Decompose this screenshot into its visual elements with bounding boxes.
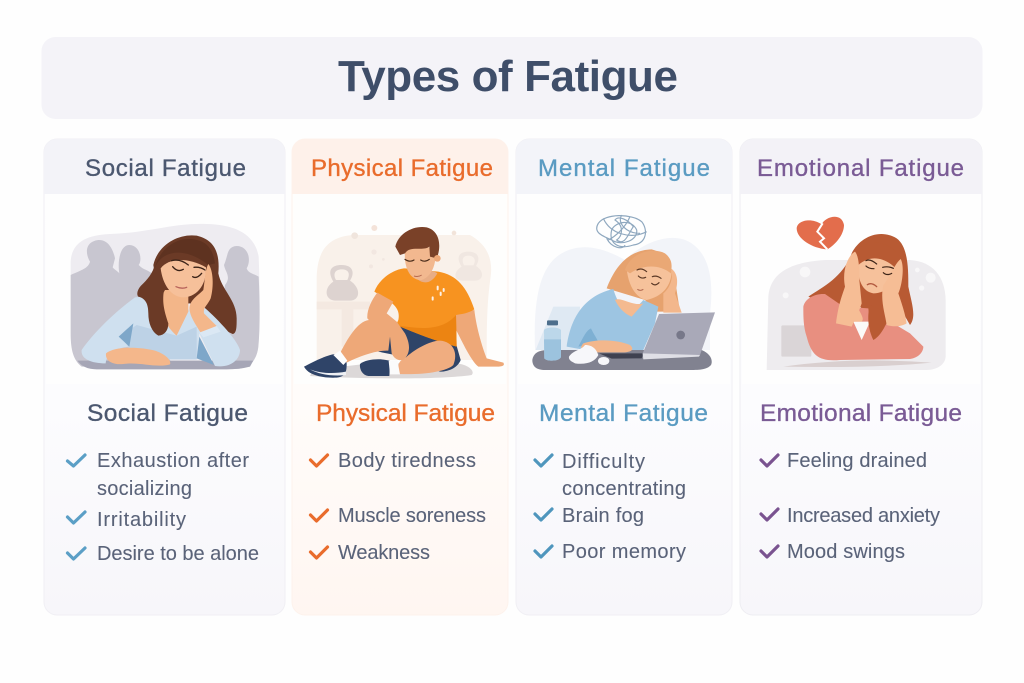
subheading: mental fatigue: Mental Fatigue (539, 400, 708, 427)
panel: physical fatigue (292, 139, 508, 615)
symptom list: emotional (761, 450, 940, 563)
symptom list: emotional: Increased anxiety (787, 505, 940, 527)
subheading: physical fatigue: Physical Fatigue (316, 400, 495, 427)
symptom list: mental (535, 451, 686, 563)
illustration: woman at laptop with tangled thoughts (532, 214, 715, 370)
symptom list: physical: Body tiredness (338, 450, 476, 472)
symptom list: mental: Poor memory (562, 541, 686, 563)
subheading: social fatigue: Social Fatigue (87, 400, 248, 427)
symptom list: social: Exhaustion after (97, 450, 249, 472)
panel: mental fatigue (516, 139, 732, 615)
symptom list: social: Irritability (97, 509, 186, 531)
illustration: tired woman among silhouettes (70, 224, 260, 370)
title banner (42, 37, 982, 119)
symptom list: emotional: Mood swings (787, 541, 905, 563)
panel: emotional fatigue (740, 139, 982, 615)
symptom list: mental: concentrating (562, 478, 686, 500)
heading: emotional fatigue: Emotional Fatigue (757, 155, 964, 182)
illustration: woman holding head with broken heart (766, 216, 946, 370)
symptom list: social: Desire to be alone (97, 543, 259, 565)
symptom list: mental: Difficulty (562, 451, 645, 473)
symptom list: social: socializing (97, 478, 192, 500)
symptom list: physical: Weakness (338, 542, 430, 564)
symptom list: emotional: Feeling drained (787, 450, 927, 472)
symptom list: physical: Muscle soreness (338, 505, 486, 527)
heading: physical fatigue: Physical Fatigue (311, 155, 493, 182)
title: Types of Fatigue (338, 52, 678, 101)
illustration: exhausted man sitting with kettlebells (304, 225, 504, 378)
symptom list: physical (310, 450, 486, 564)
panel: social fatigue (44, 139, 285, 615)
symptom list: mental: Brain fog (562, 505, 644, 527)
heading: mental fatigue: Mental Fatigue (538, 155, 710, 182)
heading: social fatigue: Social Fatigue (85, 155, 246, 182)
subheading: emotional fatigue: Emotional Fatigue (760, 400, 962, 427)
symptom list: social (68, 450, 259, 565)
